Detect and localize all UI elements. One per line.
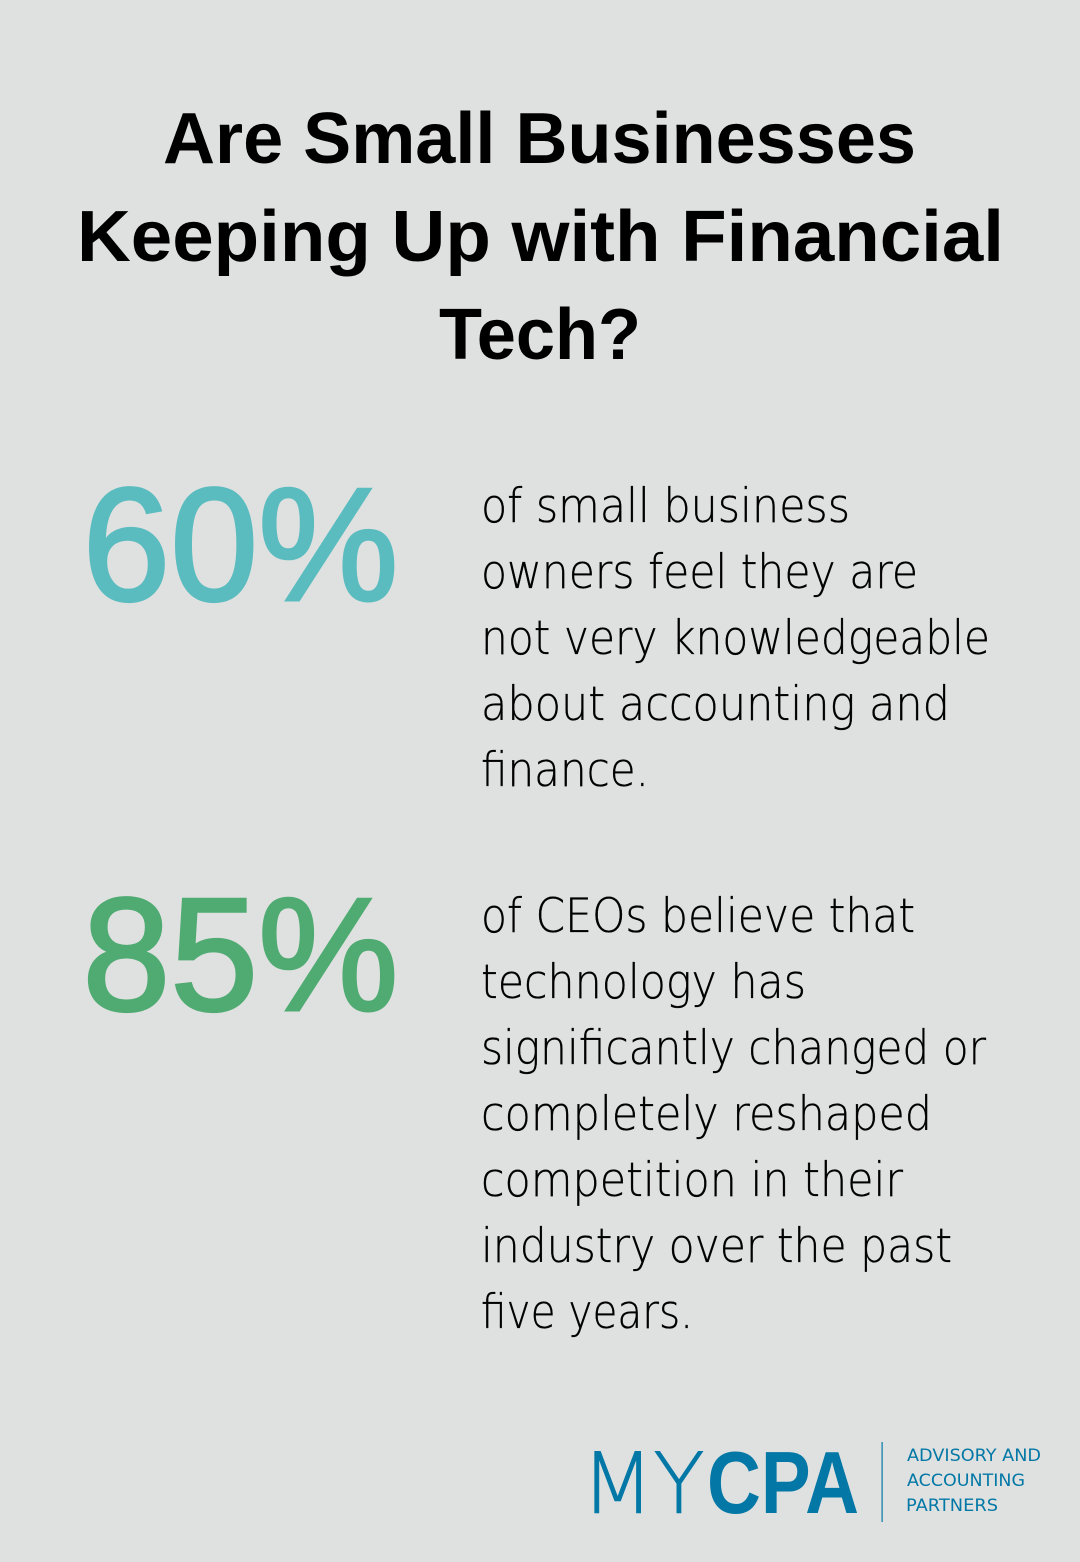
- text block: 85% description: significantly changed or: [481, 1021, 987, 1076]
- title: Are Small Businesses: [163, 99, 916, 179]
- text block: 85% description: completely reshaped: [481, 1087, 932, 1142]
- text block: 85% description: [481, 889, 987, 1340]
- logo: MYCPA: MY: [581, 1435, 705, 1534]
- text block: 85% description: competition in their: [481, 1153, 904, 1208]
- text block: 60% description: not very knowledgeable: [481, 611, 990, 666]
- text block: 60% description: finance.: [481, 743, 649, 798]
- text block: 60% description: [481, 479, 990, 798]
- text block: 85% description: industry over the past: [481, 1219, 952, 1274]
- stat: 60%: 60%: [82, 455, 398, 635]
- logo: MYCPA: PARTNERS: [906, 1496, 998, 1515]
- title: [77, 99, 1004, 375]
- title: Tech?: [439, 295, 641, 375]
- logo: MYCPA: [581, 1433, 1041, 1534]
- text block: 85% description: five years.: [481, 1285, 693, 1340]
- stat: 85%: 85%: [82, 865, 398, 1045]
- logo: MYCPA: ADVISORY AND: [907, 1446, 1041, 1465]
- text block: 60% description: owners feel they are: [481, 545, 918, 600]
- text block: 85% description: of CEOs believe that: [481, 889, 915, 944]
- text block: 60% description: about accounting and: [481, 677, 950, 732]
- text block: 85% description: technology has: [481, 955, 806, 1010]
- logo: MYCPA: CPA: [707, 1433, 859, 1532]
- logo: MYCPA: ACCOUNTING: [907, 1471, 1025, 1490]
- text block: 60% description: of small business: [481, 479, 850, 534]
- title: Keeping Up with Financial: [77, 197, 1004, 277]
